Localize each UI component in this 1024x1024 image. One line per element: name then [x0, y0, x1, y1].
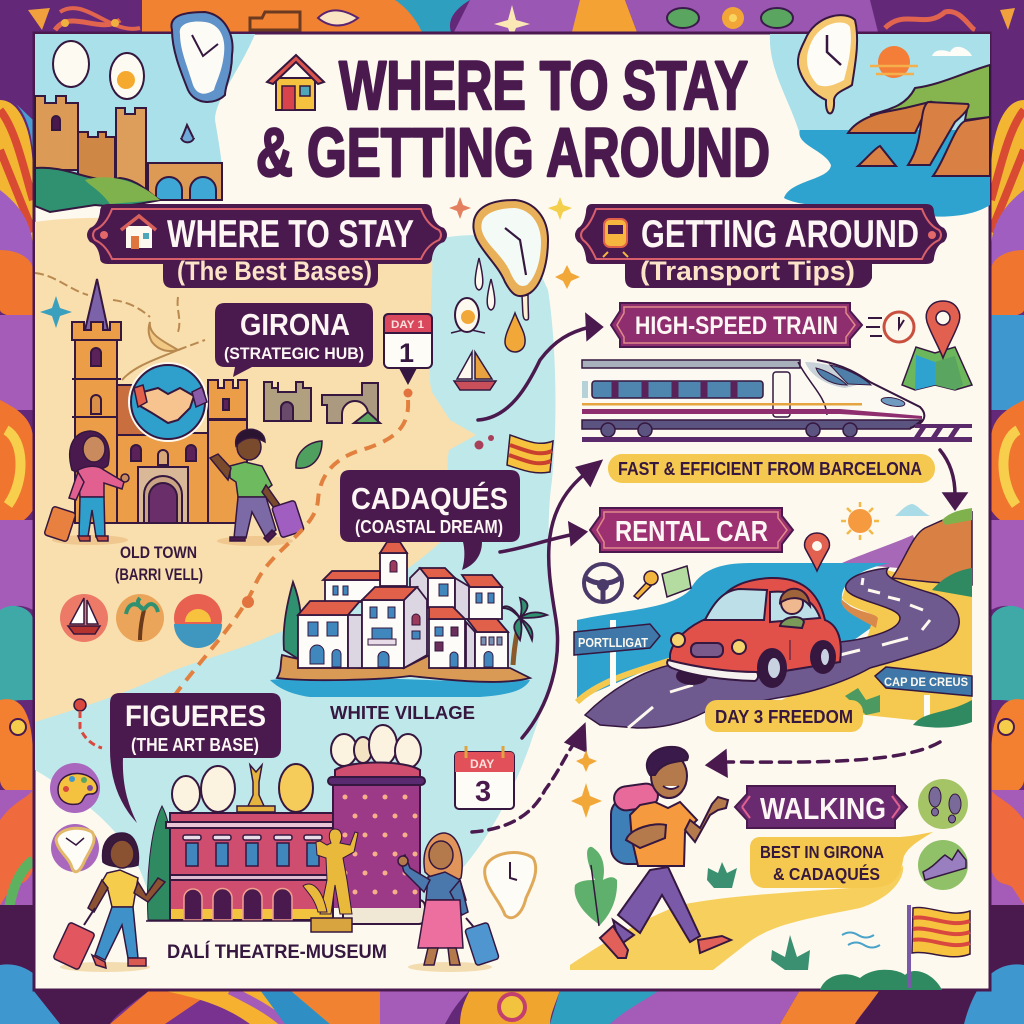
purple hill: [842, 535, 925, 570]
castle towers: [35, 96, 222, 200]
map borders: regional lines: [35, 273, 205, 380]
sun: [841, 502, 879, 540]
yellow land: [770, 570, 972, 725]
traveller woman yellow shirt: [53, 833, 165, 972]
icon: palette: [50, 763, 100, 813]
building: [170, 813, 333, 920]
traveller man, Girona: [210, 429, 304, 546]
tree: [148, 806, 172, 920]
icon: steering wheel: [584, 564, 622, 602]
banner: rental car: [590, 508, 793, 552]
calendar: day 3: DAY: [470, 757, 494, 771]
icon: title house: [267, 55, 324, 110]
Catalan flag large: [909, 905, 970, 988]
label: old town: [115, 543, 203, 584]
speech label: Figueres: (THE ART BASE): [131, 735, 259, 755]
cliffs: [848, 65, 990, 176]
callout: fast and efficient: FAST & EFFICIENT FROM BARCELONA: [618, 459, 922, 479]
heading: getting around: (Transport Tips): [640, 256, 855, 286]
hills: [35, 168, 160, 212]
sign: Portlligat: PORTLLIGAT: [578, 636, 648, 650]
callout: best in Girona: BEST IN GIRONA: [760, 842, 884, 862]
speech label: Cadaques: CADAQUÉS: [351, 481, 508, 516]
arrow: right side: [940, 450, 965, 508]
sparkles: [571, 750, 602, 818]
arrow: dashed to walking: [472, 726, 585, 832]
melting clock top-left: [171, 12, 233, 102]
calendar: day 1: [384, 314, 432, 385]
speech label: Girona: [215, 303, 373, 377]
icon circles: boat, palm, sunset: [60, 594, 222, 648]
water: [270, 677, 530, 697]
icon: train: [603, 219, 628, 257]
white village: [270, 542, 547, 697]
upper left house: [325, 580, 380, 602]
cliff: [892, 512, 972, 585]
small icons: castle and bridge: [264, 382, 380, 423]
icon: speed clock: [866, 312, 914, 342]
icon: house: [121, 216, 156, 249]
sail boat: [454, 352, 496, 390]
Dali museum: [166, 725, 425, 924]
speech label: Figueres: FIGUERES: [125, 700, 266, 733]
center house: [362, 600, 404, 668]
callout: best in Girona: [750, 832, 933, 888]
arrow: dashed from sign to walker: [708, 742, 940, 775]
sign: Cap de Creus: [875, 667, 972, 718]
eggs: [53, 41, 144, 99]
pin: [805, 533, 829, 571]
speech label: Cadaques: [340, 470, 520, 570]
label: old town: (BARRI VELL): [115, 565, 203, 584]
map: sea: [35, 235, 557, 900]
road: [585, 568, 959, 728]
left front house: [298, 615, 348, 668]
title: [256, 47, 770, 191]
heading: where to stay: WHERE TO STAY: [167, 213, 414, 256]
walker: [600, 747, 731, 958]
callout: day 3 freedom: [705, 700, 863, 732]
drips and sparkles: [449, 197, 580, 352]
drop: [181, 125, 194, 142]
arrow: small to banner: [500, 524, 585, 552]
icon: shoe: [918, 840, 968, 890]
waves: [842, 932, 880, 948]
label: Dali museum: DALÍ THEATRE-MUSEUM: [167, 940, 387, 963]
gold statue: [303, 829, 358, 932]
banner: rental car: RENTAL CAR: [615, 516, 768, 548]
banner: high-speed train: HIGH-SPEED TRAIN: [635, 312, 838, 340]
title: WHERE TO STAY: [339, 47, 748, 124]
melting clock top-right: [798, 15, 857, 114]
ground line: [146, 920, 311, 922]
calendar: day 3: 3: [475, 776, 491, 808]
egg with yolk: [451, 298, 485, 333]
red car: [667, 578, 841, 687]
sparkle: [40, 296, 72, 328]
yellow path: [570, 865, 903, 970]
calendar: day 1: 1: [399, 338, 414, 368]
icon: key: [634, 571, 658, 599]
Girona castle: [72, 279, 247, 523]
icon: small map: [662, 566, 691, 597]
inner bend: [842, 585, 900, 622]
icon: footprints: [918, 779, 968, 829]
small islands near cape: [474, 435, 494, 450]
central melting clock: [473, 200, 548, 320]
heading: getting around: [575, 204, 947, 288]
Catalan flag: [507, 435, 553, 473]
handshake icon: [128, 362, 208, 442]
top-left castle scene: [35, 34, 255, 212]
label: old town: OLD TOWN: [120, 543, 197, 562]
top-right coast scene: [770, 34, 990, 217]
sand base: [277, 655, 530, 682]
pin and dashes: [74, 699, 102, 748]
heading: getting around: GETTING AROUND: [641, 213, 919, 256]
calendar: day 3: [455, 746, 514, 809]
map: land: [35, 218, 476, 722]
right lower houses: [429, 619, 465, 668]
speech label: Girona: (STRATEGIC HUB): [224, 344, 364, 363]
heading: where to stay: [87, 204, 447, 288]
calendar: day 1: DAY 1: [391, 319, 424, 331]
sun: [870, 46, 918, 78]
tower: [328, 725, 425, 924]
cypress: [284, 582, 302, 660]
sign: Portlligat: [574, 620, 660, 688]
arrow: to rental car: [522, 462, 600, 738]
leaf: [296, 441, 322, 468]
rear houses: [410, 568, 428, 607]
rental car scene: [577, 502, 972, 728]
speech label: Figueres: [110, 693, 281, 823]
speech label: Cadaques: (COASTAL DREAM): [355, 517, 503, 537]
cloud: [932, 47, 980, 56]
melting clock lower: [485, 853, 536, 918]
arrow: to train: [478, 316, 601, 420]
banner: high-speed train: [611, 303, 862, 347]
bushes near flag: [820, 970, 942, 990]
cloud: [895, 504, 930, 516]
plants: [575, 847, 810, 970]
callout: fast and efficient: [608, 454, 935, 483]
icon: map and pin: [902, 301, 972, 390]
heading: where to stay: (The Best Bases): [177, 256, 372, 286]
route dashed line: [175, 400, 408, 695]
train: [582, 360, 924, 437]
road markings: [628, 578, 930, 728]
location dots: [242, 388, 412, 608]
icon: clock: [51, 824, 99, 872]
sea: [577, 563, 890, 700]
palm: [513, 620, 520, 665]
sign: Cap de Creus: CAP DE CREUS: [884, 675, 968, 689]
title: & GETTING AROUND: [256, 114, 770, 191]
speech label: Girona: GIRONA: [240, 307, 350, 342]
traveller woman pink dress: [398, 833, 499, 972]
traveller woman, Girona: [44, 431, 129, 545]
callout: best in Girona: & CADAQUÉS: [773, 863, 880, 884]
banner: walking: WALKING: [760, 791, 886, 826]
track: [582, 424, 972, 442]
tower: [380, 553, 407, 586]
callout: day 3 freedom: DAY 3 FREEDOM: [715, 707, 853, 727]
bushes scene: [845, 688, 972, 728]
label: white village: WHITE VILLAGE: [330, 703, 475, 723]
